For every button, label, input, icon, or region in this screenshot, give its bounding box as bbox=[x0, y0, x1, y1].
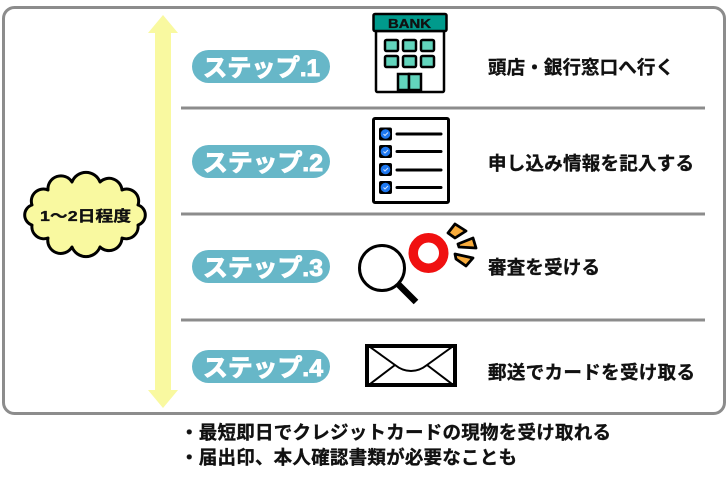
icon: bank bbox=[374, 14, 446, 92]
step 4 label: 郵送でカードを受け取る bbox=[488, 362, 695, 383]
cloud callout: 1〜2日程度: 1〜2日程度 bbox=[40, 207, 131, 225]
step badge 3: ステップ.3 bbox=[203, 255, 323, 282]
icon: bank: BANK bbox=[388, 16, 432, 31]
icon: checklist form bbox=[374, 118, 448, 202]
step 1 label: 頭店・銀行窓口へ行く bbox=[488, 57, 674, 78]
step 3 label: 審査を受ける bbox=[488, 257, 600, 278]
step badge 1: ステップ.1 bbox=[203, 55, 320, 82]
double-headed vertical arrow bbox=[148, 15, 178, 408]
note text: ・届出印、本人確認書類が必要なことも bbox=[180, 447, 517, 468]
step 2 label: 申し込み情報を記入する bbox=[488, 153, 694, 174]
note text: ・最短即日でクレジットカードの現物を受け取れる bbox=[180, 422, 611, 443]
cloud callout: 1〜2日程度 bbox=[25, 172, 145, 257]
icon: envelope bbox=[367, 346, 455, 385]
step badge 4: ステップ.4 bbox=[203, 355, 324, 382]
step badge 2: ステップ.2 bbox=[203, 150, 323, 177]
icon: red circle mark bbox=[413, 238, 444, 268]
step badge 2 bbox=[192, 145, 330, 178]
icon: magnifying glass bbox=[360, 246, 416, 302]
step badge 3 bbox=[192, 250, 330, 283]
note text bbox=[180, 422, 611, 468]
step badge 1 bbox=[192, 50, 330, 83]
step badge 4 bbox=[192, 350, 330, 383]
icon: orange sparkle marks bbox=[448, 224, 476, 266]
